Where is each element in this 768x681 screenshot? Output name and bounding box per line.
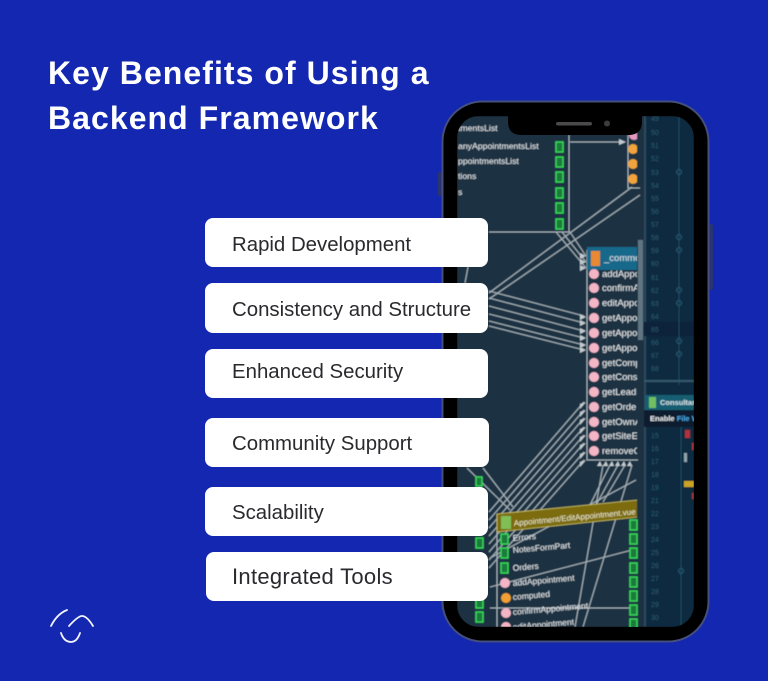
common component box: getOwnAp — [602, 417, 646, 428]
common component box: editAppoi — [602, 298, 642, 309]
right code editor panel: 58 — [651, 235, 659, 242]
right code editor panel: 63 — [651, 301, 659, 308]
right code editor panel: 23 — [651, 524, 659, 531]
card: Community Support: Community Support — [232, 433, 412, 455]
right code editor panel: 66 — [651, 340, 659, 347]
right code editor panel: 51 — [651, 143, 659, 150]
common component box: getAppoir — [602, 343, 643, 354]
card: Scalability — [205, 487, 488, 536]
right code editor panel: 52 — [651, 156, 659, 163]
right code editor panel: 29 — [651, 602, 659, 609]
card: Rapid Development: Rapid Development — [232, 234, 411, 256]
right code editor panel: 25 — [651, 550, 659, 557]
common component box — [587, 240, 648, 457]
common component box: confirmAp — [602, 283, 645, 294]
right code editor panel: 57 — [651, 222, 659, 229]
right code editor panel: 53 — [651, 170, 659, 177]
right code editor panel: 68 — [651, 366, 659, 373]
appointment component box: Appointment/EditAppointment.vue — [513, 507, 637, 528]
appointment component box: editAppointment — [512, 617, 575, 632]
card: Scalability: Scalability — [232, 502, 324, 524]
top-left list labels: s — [458, 187, 463, 197]
right code editor panel: 16 — [651, 446, 659, 453]
card: Integrated Tools: Integrated Tools — [232, 564, 393, 589]
right code editor panel: 26 — [651, 563, 659, 570]
right code editor panel: 62 — [651, 288, 659, 295]
right code editor panel: 24 — [651, 537, 659, 544]
right code editor panel: 49 — [651, 116, 659, 123]
right code editor panel: 60 — [651, 261, 659, 268]
phone side buttons — [438, 172, 713, 290]
appointment component box: confirmAppointment — [512, 600, 589, 617]
right code editor panel — [644, 116, 700, 627]
appointment component box: computed — [512, 589, 551, 602]
right code editor panel: 50 — [651, 130, 659, 137]
card: Rapid Development — [205, 218, 488, 267]
illustration: smartphone showing code diagram — [438, 100, 713, 642]
phone body — [442, 102, 708, 642]
common component box: removeOr — [602, 446, 644, 457]
card: Consistency and Structure — [205, 283, 488, 333]
common component box: addAppoi — [602, 269, 642, 280]
card: Consistency and Structure: Consistency and Structure — [232, 299, 471, 321]
orange method icons — [628, 130, 639, 184]
right code editor panel: Enable File W — [650, 414, 700, 423]
right code editor panel: 65 — [651, 327, 659, 334]
common component box: getSiteEve — [602, 431, 648, 442]
speaker and camera — [556, 120, 610, 126]
title: Backend Framework — [48, 100, 379, 136]
diagram connector lines — [465, 135, 640, 627]
top-left list labels: tmentsList — [458, 123, 498, 133]
right code editor panel: 17 — [651, 459, 659, 466]
right code editor panel: 56 — [651, 209, 659, 216]
common component box: getCompa — [602, 358, 647, 369]
right code editor panel: Consultant — [660, 398, 700, 407]
right code editor panel: 28 — [651, 589, 659, 596]
card: Community Support — [205, 418, 489, 467]
right code editor panel: 22 — [651, 511, 659, 518]
appointment component box: addAppointment — [512, 573, 575, 588]
title: Key Benefits of Using a — [48, 55, 430, 91]
common component box: getAppoir — [602, 313, 643, 324]
right code editor panel: 15 — [651, 433, 659, 440]
appointment component box: Orders — [512, 561, 539, 573]
phone screen — [457, 116, 700, 632]
right code editor panel: 18 — [651, 472, 659, 479]
phone notch — [508, 114, 642, 135]
right code editor panel: 27 — [651, 576, 659, 583]
appointment component box — [497, 500, 638, 632]
common component box: getOrderI — [602, 402, 642, 413]
common component box: getAppoir — [602, 328, 643, 339]
right code editor panel: 19 — [651, 485, 659, 492]
appointment component box: Errors — [512, 531, 536, 543]
card: Enhanced Security: Enhanced Security — [232, 361, 403, 383]
card: Integrated Tools — [206, 552, 488, 601]
top-left list labels: ppointmentsList — [458, 156, 519, 166]
right code editor panel: 21 — [651, 498, 659, 505]
common component box: _common — [603, 253, 646, 264]
right code editor panel: 59 — [651, 248, 659, 255]
right code editor panel: 55 — [651, 196, 659, 203]
right code editor panel: 67 — [651, 353, 659, 360]
common component box: getLeadsA — [602, 387, 648, 398]
card: Enhanced Security — [205, 349, 488, 398]
green port icons — [476, 142, 637, 629]
appointment component box: NotesFormPart — [512, 540, 571, 555]
top-left list labels: anyAppointmentsList — [458, 141, 539, 151]
right code editor panel: 61 — [651, 275, 659, 282]
title — [48, 55, 430, 136]
right code editor panel: 64 — [651, 314, 659, 321]
right code editor panel: 30 — [651, 615, 659, 622]
right code editor panel: 54 — [651, 183, 659, 190]
top-left list labels: tions — [458, 171, 477, 181]
arrowheads — [580, 139, 632, 467]
top-left list labels — [458, 123, 539, 197]
common component box: getConsul — [602, 372, 645, 383]
